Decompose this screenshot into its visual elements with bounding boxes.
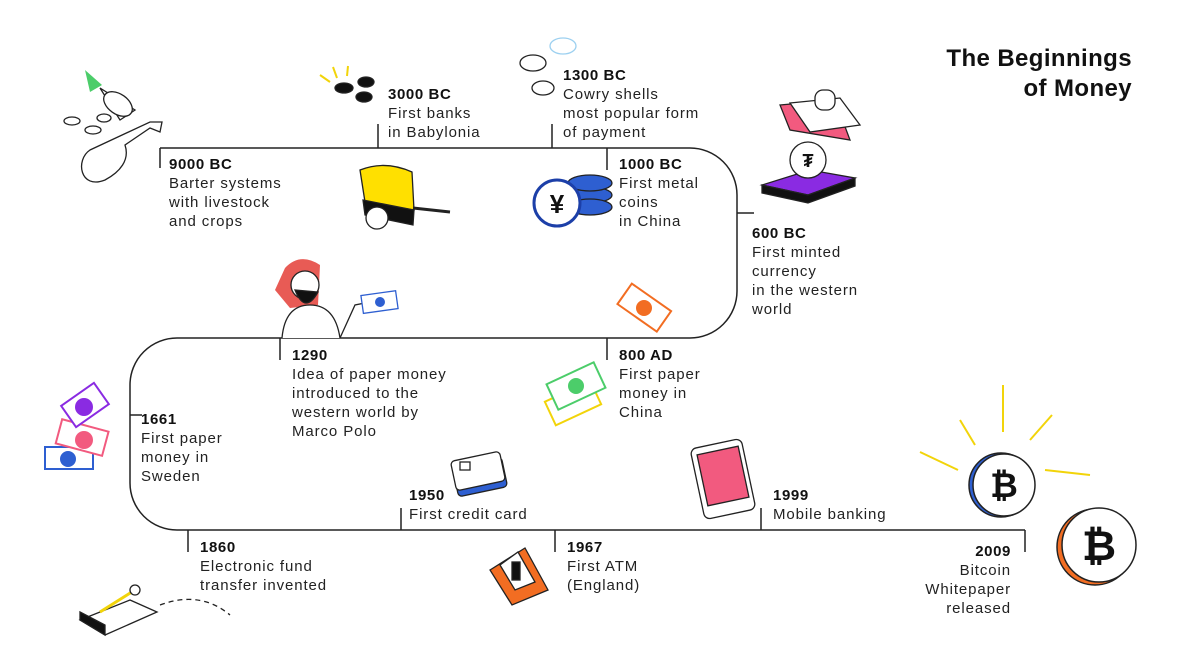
text: 1860: transfer invented (200, 577, 327, 594)
text: 2009 (925, 543, 1011, 617)
text: 1300 BC (563, 67, 699, 141)
text: 800 AD: money in (619, 385, 687, 402)
text: 1967: 1967 (567, 539, 603, 556)
text: 1661: 1661 (141, 411, 177, 428)
text: 1300 BC: Cowry shells (563, 86, 659, 103)
text: 1661 (141, 411, 223, 485)
text: 9000 BC: with livestock (169, 194, 270, 211)
text: 1999: Mobile banking (773, 506, 886, 523)
text: 800 AD (619, 347, 701, 421)
icon: orange yuan note (617, 284, 671, 332)
icon: green notes (545, 362, 605, 425)
icon: yen coin (534, 175, 612, 226)
text: 1300 BC: most popular form (563, 105, 699, 122)
text: 3000 BC: in Babylonia (388, 124, 481, 141)
text: 600 BC: First minted (752, 244, 841, 261)
text: 1860: 1860 (200, 539, 236, 556)
icon: krona notes (45, 383, 109, 469)
icon: yen coin: ¥ (550, 189, 565, 219)
text: 1999 (773, 487, 886, 523)
icon: phone (690, 438, 756, 520)
icon: beans (320, 66, 374, 102)
text: 1950 (409, 487, 528, 523)
text: 600 BC (752, 225, 858, 318)
text: 2009: Whitepaper (925, 581, 1011, 598)
text: 1661: Sweden (141, 468, 201, 485)
text: 2009: Bitcoin (960, 562, 1011, 579)
text: 1300 BC: of payment (563, 124, 646, 141)
text: 1290: introduced to the (292, 385, 419, 402)
icon: cart (360, 165, 450, 229)
text: 1950: 1950 (409, 487, 445, 504)
text: 1290: Marco Polo (292, 423, 377, 440)
text: 2009: 2009 (975, 543, 1011, 560)
title (946, 45, 1132, 102)
text: 1661: First paper (141, 430, 223, 447)
text: 1967 (567, 539, 640, 594)
text: 600 BC: in the western (752, 282, 858, 299)
text: 1290: Idea of paper money (292, 366, 447, 383)
icon: telegraph (80, 585, 230, 635)
icon: shells (520, 38, 576, 95)
text: 1290: 1290 (292, 347, 328, 364)
text: 1000 BC (619, 156, 699, 230)
text: 800 AD: First paper (619, 366, 701, 383)
text: 600 BC: currency (752, 263, 817, 280)
icon: stamp and coin: ₮ (802, 151, 814, 171)
title: of Money (1023, 75, 1132, 102)
icon: barter food (64, 70, 162, 182)
icon: bitcoin coins: ₿ (990, 467, 1018, 505)
text: 1300 BC: 1300 BC (563, 67, 626, 84)
text: 1999: 1999 (773, 487, 809, 504)
text: 800 AD: China (619, 404, 663, 421)
icon: stamp and coin (762, 90, 860, 203)
text: 800 AD: 800 AD (619, 347, 673, 364)
text: 1860: Electronic fund (200, 558, 313, 575)
text: 1290 (292, 347, 447, 440)
text: 1000 BC: 1000 BC (619, 156, 682, 173)
icon: Marco Polo (275, 259, 398, 338)
title: The Beginnings (946, 45, 1132, 72)
text: 600 BC: 600 BC (752, 225, 806, 242)
text: 1967: First ATM (567, 558, 638, 575)
icon: credit card (450, 451, 508, 497)
text: 9000 BC: 9000 BC (169, 156, 232, 173)
text: 3000 BC: 3000 BC (388, 86, 451, 103)
text: 9000 BC (169, 156, 282, 230)
text: 1967: (England) (567, 577, 640, 594)
text: 1000 BC: First metal (619, 175, 699, 192)
text: 9000 BC: and crops (169, 213, 243, 230)
text: 1950: First credit card (409, 506, 528, 523)
text: 2009: released (946, 600, 1011, 617)
icon: bitcoin coins: ₿ (1082, 522, 1116, 569)
text: 600 BC: world (752, 301, 792, 318)
text: 1000 BC: in China (619, 213, 681, 230)
text: 3000 BC (388, 86, 481, 141)
text: 1860 (200, 539, 327, 594)
icon: ATM (490, 548, 548, 605)
icon: bitcoin coins (920, 385, 1136, 585)
text: 1000 BC: coins (619, 194, 659, 211)
text: 1290: western world by (292, 404, 419, 421)
text: 3000 BC: First banks (388, 105, 471, 122)
text: 1661: money in (141, 449, 209, 466)
text: 9000 BC: Barter systems (169, 175, 282, 192)
